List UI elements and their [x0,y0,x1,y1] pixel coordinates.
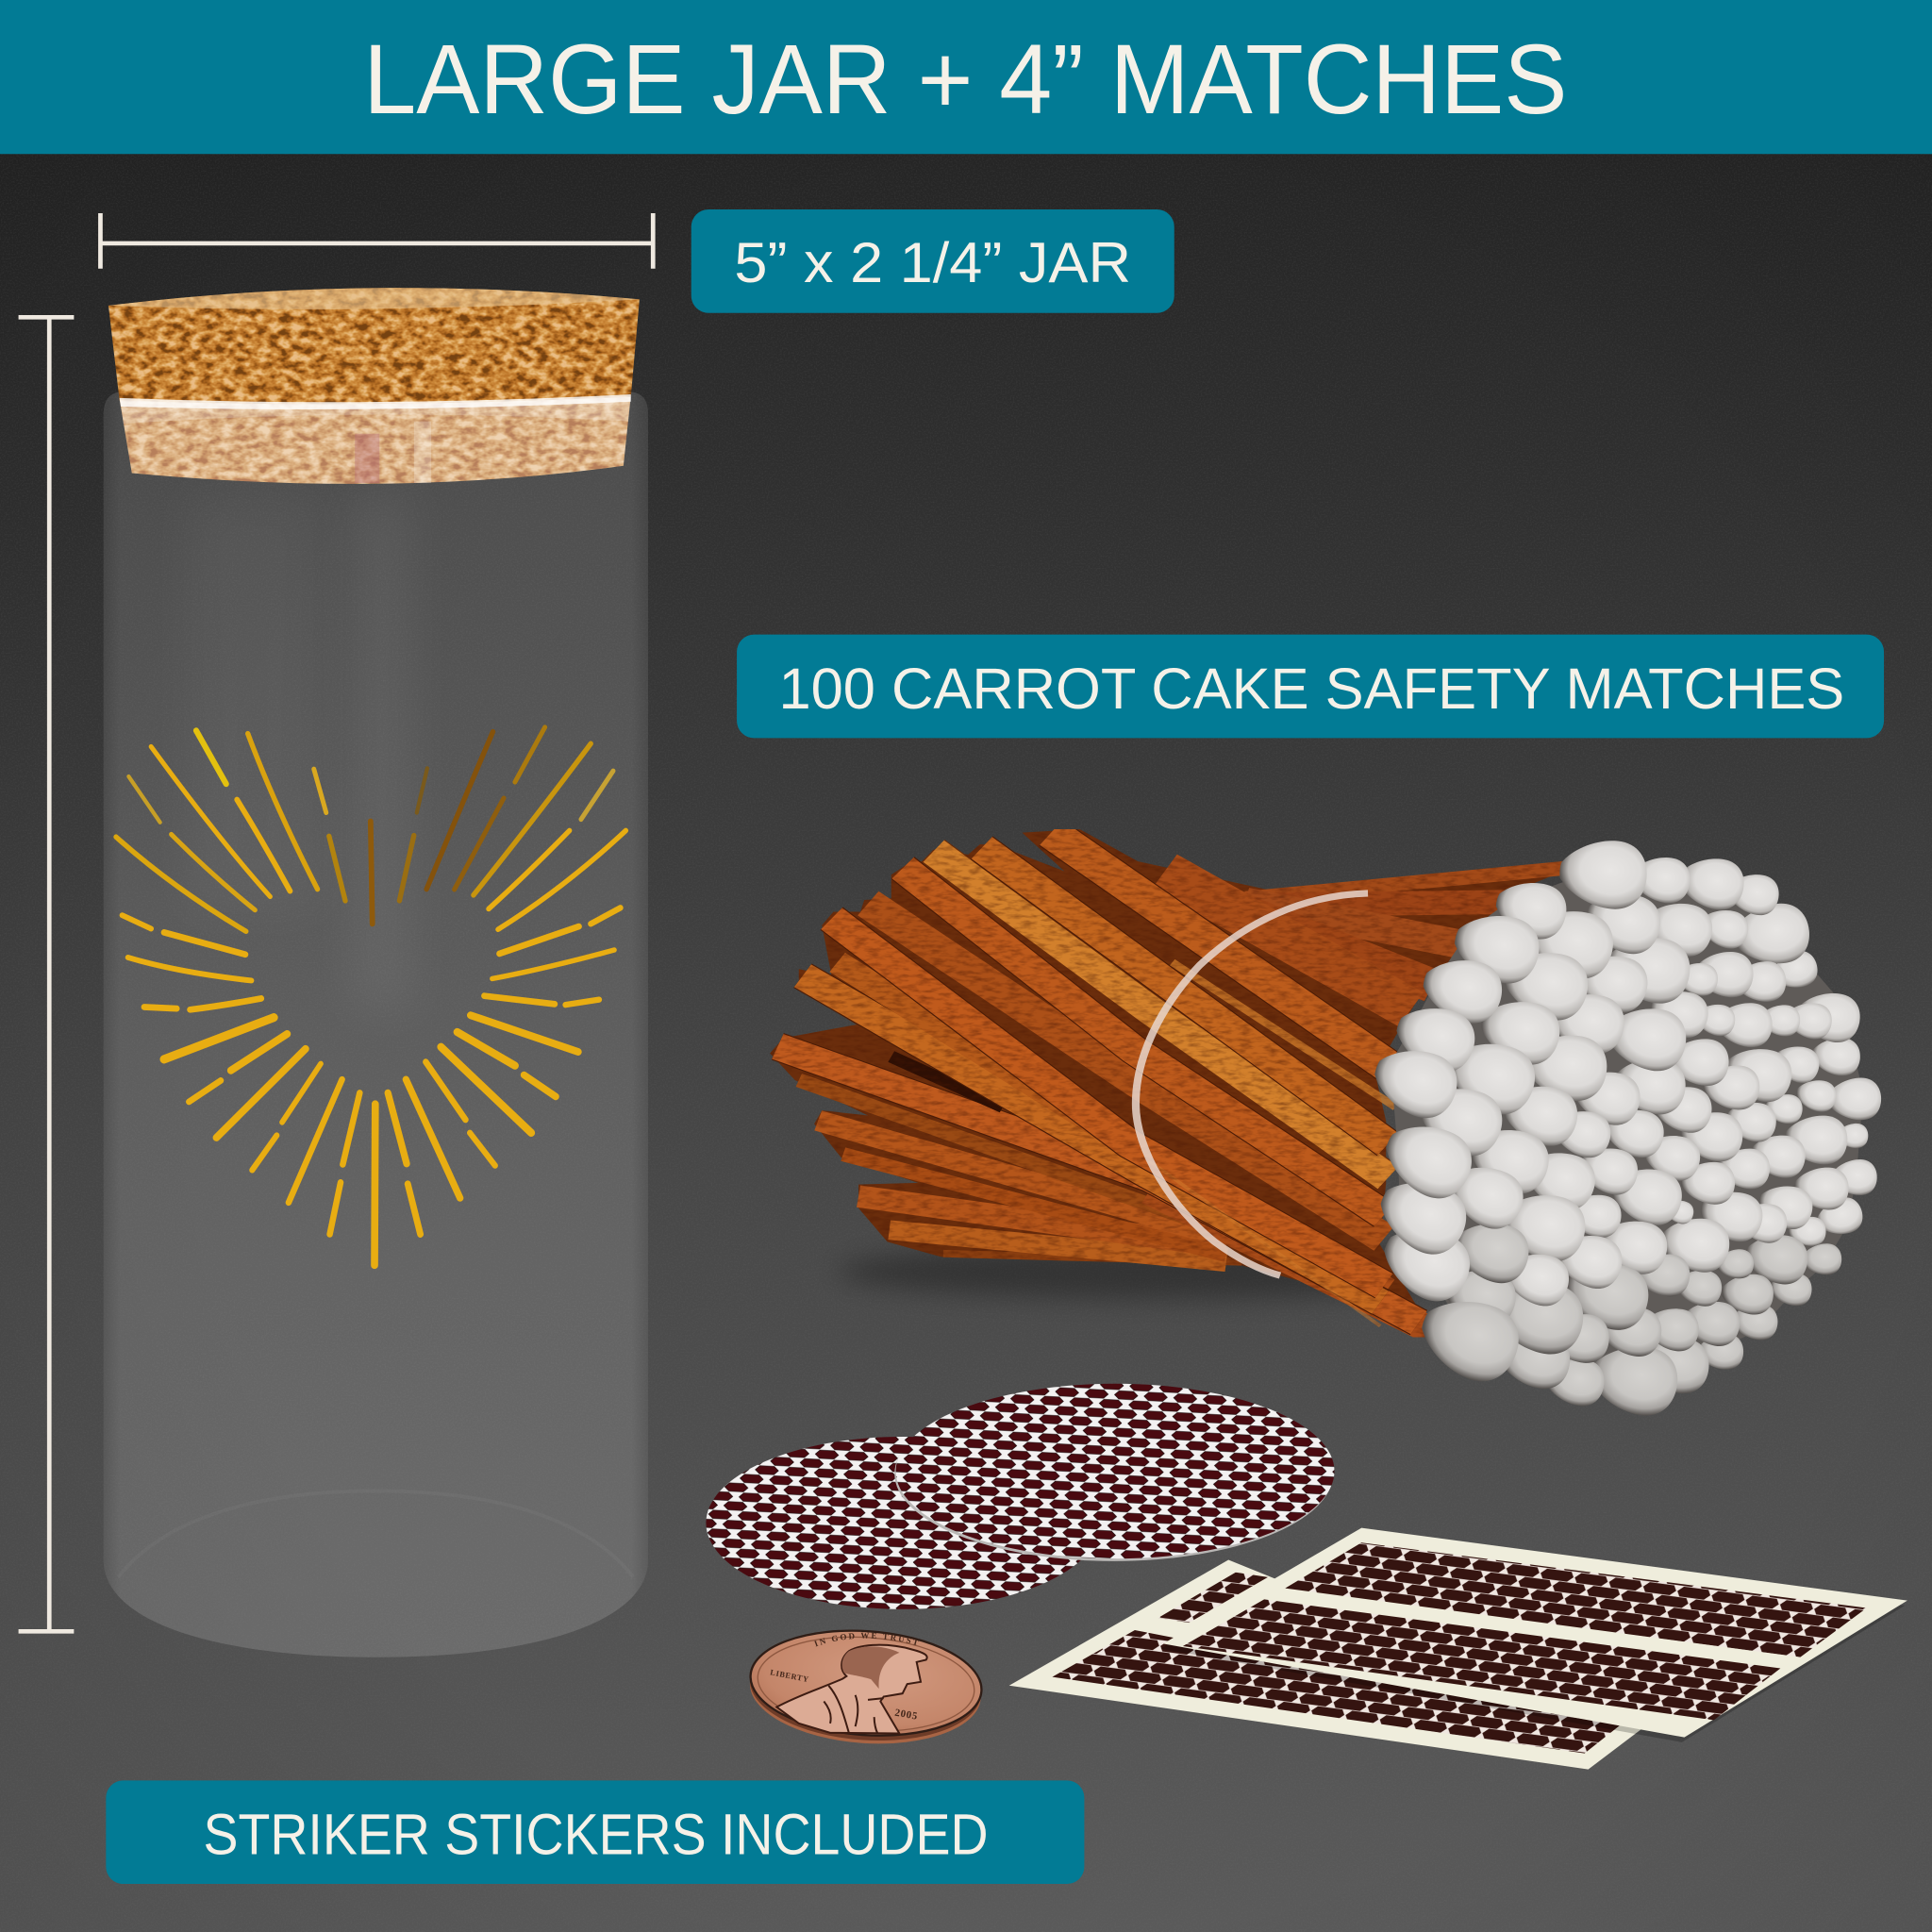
gold heart sunburst on jar [116,727,625,1265]
jar size label: 5” x 2 1/4” JAR [734,231,1131,294]
penny for scale [749,1630,983,1743]
cork top face [108,288,640,309]
penny for scale: 2005 [893,1707,919,1723]
match bundle shadow [838,1244,1503,1299]
striker stickers label: STRIKER STICKERS INCLUDED [204,1803,989,1868]
cork lower part inside the jar [120,395,631,484]
glass rim highlight [121,397,631,424]
bundle of matches [770,829,1881,1421]
penny portrait [776,1645,927,1733]
back sheet [1009,1560,1643,1770]
front sheet [1160,1528,1907,1742]
elastic band [1136,893,1368,1275]
jar width dimension line [100,213,653,269]
jar size label [691,209,1174,313]
cork upper part [108,288,640,404]
matches count label: 100 CARROT CAKE SAFETY MATCHES [778,657,1844,722]
title banner [0,0,1932,154]
round striker stickers [706,1384,1335,1609]
glass jar [104,391,648,1657]
white match heads [1365,836,1881,1421]
penny lettering: IN GOD WE TRUST [813,1632,919,1647]
lower round sticker [706,1437,1100,1609]
jar height dimension line [19,317,74,1631]
match sticks [770,829,1567,1337]
cork stopper [108,288,640,484]
upper round sticker [896,1384,1335,1558]
striker stickers label [106,1780,1084,1884]
penny for scale: LIBERTY [770,1668,809,1684]
striker sticker sheets [1009,1528,1907,1770]
matches count label [737,635,1884,738]
title: LARGE JAR + 4” MATCHES [363,25,1567,135]
